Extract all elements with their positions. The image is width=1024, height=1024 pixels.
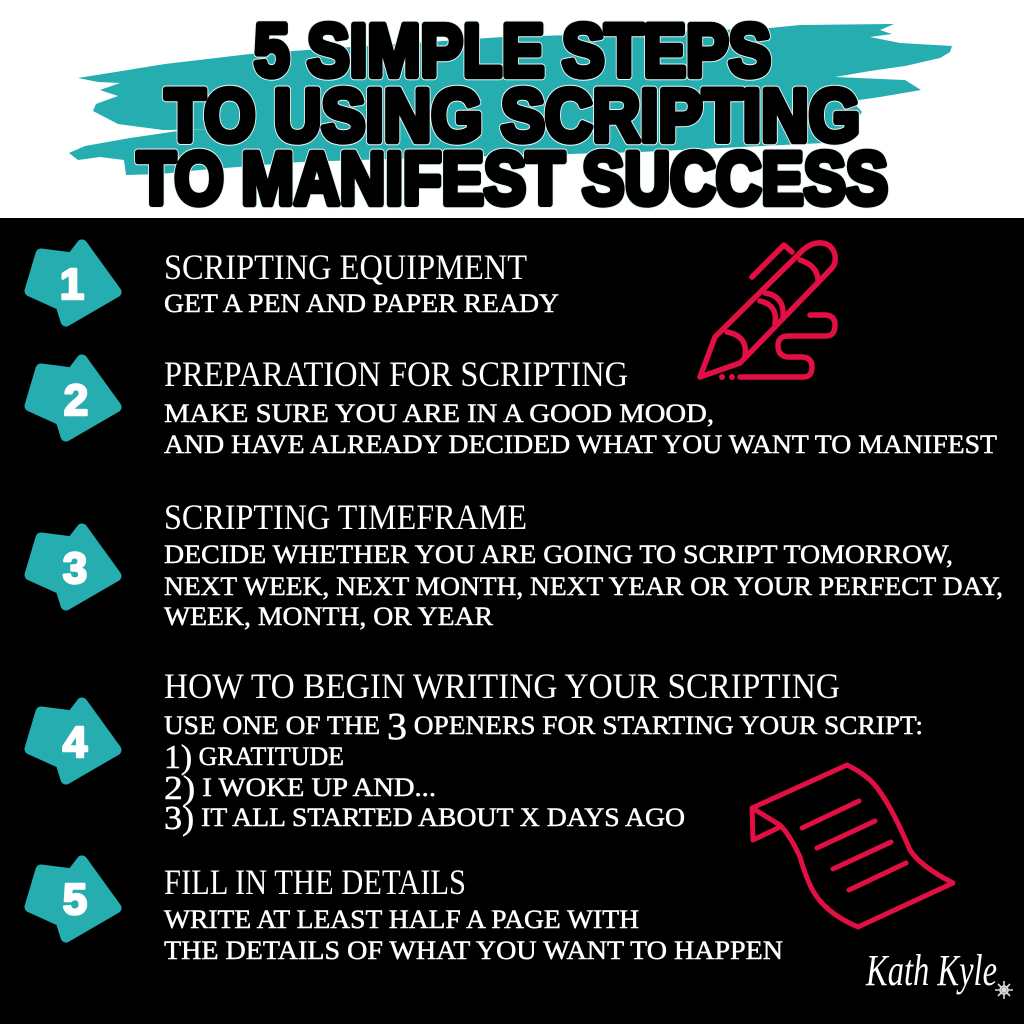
title: 5 SIMPLE STEPS	[254, 9, 771, 92]
step 4 badge: 4	[63, 718, 88, 767]
step 4 text: IT ALL STARTED ABOUT X DAYS AGO	[194, 803, 685, 832]
step 4 badge	[30, 703, 116, 779]
step 3 text: DECIDE WHETHER YOU ARE GOING TO SCRIPT TOMORROW,	[164, 540, 953, 569]
icon: paper scroll	[752, 765, 953, 927]
step 3 text	[164, 497, 1003, 631]
step 5 text	[164, 862, 783, 965]
step 4 text: OPENERS FOR STARTING YOUR SCRIPT:	[407, 711, 923, 740]
step 2 text	[164, 354, 997, 459]
step 5 badge	[30, 861, 116, 937]
title: TO USING SCRIPTING	[165, 74, 860, 157]
step 1 text: SCRIPTING EQUIPMENT	[164, 247, 527, 287]
teal brush stroke	[69, 24, 952, 175]
step 2 text: PREPARATION FOR SCRIPTING	[164, 354, 628, 394]
step 5 text: FILL IN THE DETAILS	[164, 862, 466, 902]
step 2 text: MAKE SURE YOU ARE IN A GOOD MOOD,	[164, 399, 714, 428]
step 3 badge	[30, 529, 116, 605]
step 1 badge: 1	[60, 260, 84, 309]
step 3 text: NEXT WEEK, NEXT MONTH, NEXT YEAR OR YOUR PERFECT DAY,	[164, 572, 1003, 601]
step 1 badge	[30, 245, 116, 321]
title: 5 SIMPLE STEPS	[254, 9, 771, 92]
step 5 badge: 5	[63, 875, 87, 924]
step 5 text: WRITE AT LEAST HALF A PAGE WITH	[164, 905, 639, 934]
step 2 badge	[30, 360, 116, 436]
step 4 text: HOW TO BEGIN WRITING YOUR SCRIPTING	[164, 666, 840, 706]
title	[137, 9, 888, 220]
step 4 text: 3	[387, 706, 407, 748]
title: TO USING SCRIPTING	[165, 74, 860, 157]
header panel	[0, 0, 1024, 220]
step 4 text	[164, 666, 923, 837]
icon: pen	[700, 243, 835, 377]
step 4 text: 1)	[164, 739, 192, 776]
step 1 text	[164, 247, 559, 318]
step 2 text: AND HAVE ALREADY DECIDED WHAT YOU WANT TO MANIFEST	[164, 430, 997, 459]
title: TO MANIFEST SUCCESS	[137, 137, 888, 220]
step 5 text: THE DETAILS OF WHAT YOU WANT TO HAPPEN	[164, 936, 783, 965]
icon: snowflake	[995, 981, 1013, 999]
step 4 text: USE ONE OF THE	[164, 711, 369, 740]
step 4 text: 2)	[164, 770, 195, 807]
step 3 text: SCRIPTING TIMEFRAME	[164, 497, 527, 537]
step 1 text: GET A PEN AND PAPER READY	[164, 289, 559, 318]
title: TO MANIFEST SUCCESS	[137, 137, 888, 220]
step 3 text: WEEK, MONTH, OR YEAR	[164, 602, 494, 631]
step 3 badge: 3	[63, 544, 87, 593]
step 2 badge: 2	[64, 376, 88, 425]
step 4 text: I WOKE UP AND...	[195, 773, 436, 802]
step 4 text: 3)	[164, 800, 194, 837]
step 4 text: GRATITUDE	[192, 742, 344, 771]
